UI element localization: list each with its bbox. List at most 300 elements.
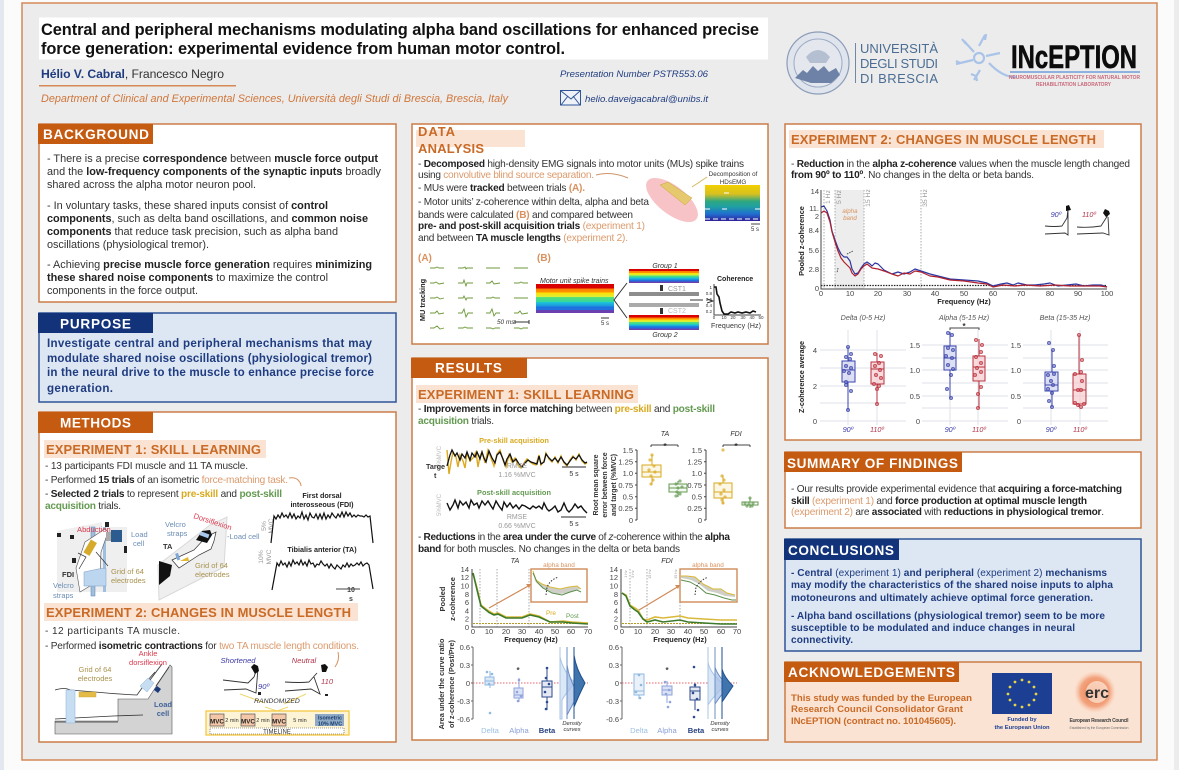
panel: summary of findings (784, 452, 1141, 528)
chart: post-skill force trace: 5 s (569, 521, 579, 528)
chart: pre-skill force trace: Pre-skill acquisition (479, 436, 549, 445)
timeline: 2 min (256, 718, 270, 724)
chart: TA pooled z-coherence: 50 (551, 627, 559, 636)
chart: FDI pooled z-coherence: 10 (610, 582, 618, 590)
chart: TA area under the curve ratio: of z-coherence (Post/Pre) (447, 639, 456, 728)
chart: alpha box plot: 110º (972, 425, 986, 434)
chart: pooled z-coherence by muscle length: 20 (874, 289, 882, 298)
chart: pooled z-coherence by muscle length: 2.8 (809, 265, 819, 274)
chart: TA pooled z-coherence: 10 (485, 627, 493, 636)
figure: leg dynamometer setup: dorsiflexion (129, 658, 167, 667)
chart: RMSE box plots FDI: 1.0 (692, 469, 702, 478)
chart: FDI pooled z-coherence: 0 (620, 627, 624, 636)
chart: TA pooled z-coherence: 20 (502, 627, 510, 636)
chart: FDI area under the curve ratio: -0.6 (606, 715, 619, 724)
force matching text: acquisition trials. (418, 416, 494, 427)
chart: FDI pooled z-coherence: 8 (614, 590, 618, 599)
chart: TA pooled z-coherence: 0 (465, 623, 469, 632)
panel: experiment 2 results (785, 124, 1141, 440)
chart: TA pooled z-coherence: 60 (567, 627, 575, 636)
chart: TA area under the curve ratio: Area under the curve ratio (437, 638, 446, 729)
chart: pooled z-coherence by muscle length: 1 Hz (825, 189, 832, 204)
logo: European Research Council (1070, 671, 1129, 730)
acknowledgement text: This study was funded by the European (791, 693, 972, 704)
chart: beta box plot: Beta (15-35 Hz) (1040, 313, 1090, 322)
figure: foot positions and timeline (206, 652, 349, 736)
chart: FDI area under the curve ratio: 0.6 (609, 643, 619, 652)
timeline: MVC (241, 718, 255, 726)
background text: - There is a precise correspondence between muscle force output (47, 153, 378, 165)
timeline: 10% MVC (318, 722, 342, 728)
chart: alpha box plot: 1.5 (910, 341, 920, 350)
chart: FDI pooled z-coherence: 10 (634, 627, 642, 636)
chart: RMSE box plots TA: 0.5 (623, 492, 633, 502)
experiment 1 text: - Performed 15 trials of an isometric force-matching task. (45, 475, 288, 486)
figure: foot positions and timeline: Shortened (220, 656, 256, 665)
chart: RMSE box plots FDI (687, 431, 758, 525)
figure: leg setup for TA: straps (167, 529, 188, 538)
force matching text: - Improvements in force matching between pre-skill and post-skill (418, 404, 715, 415)
experiment 2 text: - Performed isometric contractions for two TA muscle length conditions. (45, 641, 359, 652)
chart: FDI pooled z-coherence: Frequency (Hz) (653, 635, 707, 644)
chart: pre-skill force trace: 1.16 %MVC (498, 472, 536, 479)
chart: pre-skill force trace: Targe (426, 462, 445, 471)
chart: pooled z-coherence by muscle length: 0 (819, 289, 823, 298)
logo: INcEPTION: REHABILITATION LABORATORY (1036, 82, 1111, 88)
background text: - Achieving precise muscle force generation requires minimizing (47, 259, 372, 271)
chart: TA area under the curve ratio: 0.6 (460, 643, 470, 652)
figure: leg dynamometer setup: Grid of 64 (79, 665, 111, 674)
figure: leg setup for TA: electrodes (195, 570, 230, 579)
background text: and the low-frequency components of the synaptic inputs broadly (47, 166, 382, 178)
chart: pooled z-coherence by muscle length: 30 (903, 289, 911, 298)
chart: FDI area under the curve ratio: 0.3 (609, 661, 619, 670)
chart: RMSE box plots FDI: 0.5 (692, 492, 702, 502)
panel: data analysis (412, 124, 768, 344)
chart: pre-skill force trace (426, 436, 587, 480)
chart: TA area under the curve ratio: curves (563, 727, 581, 733)
heading: data analysis: ANALYSIS (418, 141, 484, 156)
chart: RMSE box plots TA: Root mean square (593, 454, 600, 516)
icon: foot at 90 and 110 degrees: 110º (1082, 210, 1096, 219)
figure: hand setup for FDI: Abduction (77, 525, 111, 534)
chart: FDI area under the curve ratio: Delta (630, 726, 649, 735)
coherence chart: 50 (758, 315, 764, 320)
heading: purpose (38, 313, 153, 333)
presentation number: Presentation Number PSTR553.06 (560, 69, 709, 80)
chart: RMSE box plots FDI: 0.25 (687, 504, 702, 513)
timeline: MVC (210, 718, 224, 726)
chart: FDI pooled z-coherence: 0 (614, 623, 618, 632)
chart: delta box plot: 2 (813, 382, 817, 391)
purpose text: modulate shared noise oscillations (physiological tremor) (47, 352, 372, 365)
title: force generation: experimental evidence from human motor control. (41, 40, 565, 58)
chart: alpha box plot: 0 (916, 417, 920, 426)
purpose text: generation. (47, 382, 113, 395)
icon: foot at 90 and 110 degrees (1045, 205, 1110, 235)
density curves TA (560, 647, 585, 719)
panel: purpose (38, 313, 396, 402)
figure: hand setup for FDI (53, 522, 148, 600)
chart: RMSE box plots TA: TA (661, 431, 670, 438)
conclusions text: - Central (experiment 1) and peripheral (experiment 2) mechanisms (791, 568, 1107, 579)
conclusions text: susceptible to be modulated and induce changes in neural (791, 623, 1075, 634)
background text: components that reduce task precision, such as alpha band (47, 226, 338, 238)
chart: beta box plot: 1.5 (1011, 341, 1021, 350)
subheading: experiment 1: EXPERIMENT 1: SKILL LEARNING (46, 442, 261, 457)
figure: muscle and HDsEMG decomposition: Decomposition of (709, 171, 758, 178)
data analysis text: pre- and post-skill acquisition trials (experiment 1) (418, 221, 645, 232)
force matching text (418, 404, 715, 427)
chart: RMSE box plots FDI: FDI (730, 431, 742, 438)
chart: pooled z-coherence by muscle length: Frequency (Hz) (937, 297, 991, 306)
chart: FDI pooled z-coherence: 14 (610, 565, 618, 574)
acknowledgement text (791, 693, 972, 727)
logo: Università degli Studi di Brescia (787, 32, 938, 94)
chart: TA area under the curve ratio: Density (562, 721, 583, 727)
chart: FDI area under the curve ratio: -0.3 (606, 697, 619, 706)
chart: RMSE box plots TA: 0.75 (618, 481, 633, 490)
chart: FDI area under the curve ratio: curves (711, 727, 729, 733)
chart: FDI pooled z-coherence: 12 (610, 573, 618, 582)
chart: RMSE box plots TA: 1.25 (618, 458, 633, 466)
chart: pooled z-coherence by muscle length: 11. (809, 204, 819, 213)
figure: (B) coherence pipeline: CST1 (668, 286, 686, 293)
figure: hand setup for FDI: Velcro (53, 581, 74, 590)
figure: hand setup for FDI: Grid of 64 (111, 567, 144, 576)
coherence chart (706, 276, 764, 330)
chart: beta box plot: 110º (1073, 425, 1087, 434)
acknowledgement text: INcEPTION (contract no. 101045605). (791, 716, 956, 727)
chart: delta box plot: 4 (813, 346, 817, 355)
experiment 1 text (45, 461, 301, 512)
figure: leg setup for TA: -Load cell (227, 532, 260, 541)
chart: pooled z-coherence by muscle length: 15 Hz (865, 189, 872, 207)
panel: results (411, 358, 768, 740)
chart: pooled z-coherence by muscle length: 5.6 (809, 246, 819, 255)
data analysis text (418, 159, 744, 244)
background text: components, such as delta band oscillations, and common noise (47, 213, 368, 225)
chart: TA pooled z-coherence: 30 (518, 627, 526, 636)
heading: conclusions (784, 539, 899, 560)
background text: these shared noise components to maximize the control (47, 272, 328, 284)
chart: FDI area under the curve ratio: Beta (688, 726, 705, 735)
chart: pooled z-coherence by muscle length: 5 Hz (836, 189, 843, 204)
chart: pooled z-coherence by muscle length: 8.4 (809, 226, 819, 235)
data analysis text: bands were calculated (B) and compared between (418, 210, 633, 221)
chart: TA area under the curve ratio: -0.6 (457, 715, 470, 724)
chart: TA pooled z-coherence: Pre (546, 610, 556, 617)
chart: post-skill force trace (437, 488, 587, 530)
inset: TA alpha band (531, 562, 587, 602)
chart: TA area under the curve ratio: 0 (466, 679, 470, 688)
experiment 1 text: - Selected 2 trials to represent pre-skill and post-skill (45, 489, 282, 500)
experiment 2 results text: from 90º to 110º. No changes in the delta or beta bands. (791, 170, 1034, 181)
density curves FDI (708, 647, 733, 719)
coherence chart: 0.8 (706, 291, 712, 296)
logo: INcEPTION: INcEPTION (1011, 39, 1137, 75)
data analysis text: and between TA muscle lengths (experiment 2). (418, 233, 628, 244)
logo: European Research Council: Established by the European Commission (1070, 726, 1128, 730)
chart: TA area under the curve ratio (437, 638, 588, 735)
chart: RMSE box plots FDI: 0 (698, 516, 702, 525)
chart: RMSE box plots FDI: 1.25 (687, 458, 702, 466)
chart: pre-skill force trace: 5%MVC (437, 445, 443, 468)
heading: experiment 2 results: EXPERIMENT 2: CHANGES IN MUSCLE LENGTH (791, 132, 1096, 147)
chart: pre-skill force trace: t (434, 471, 437, 480)
subheading: experiment 1 results: EXPERIMENT 1: SKILL LEARNING (418, 387, 634, 402)
conclusions text: - Alpha band oscillations (physiological tremor) seem to be more (791, 611, 1105, 622)
chart: FDI pooled z-coherence: 20 (651, 627, 659, 636)
figure: leg setup for TA: Grid of 64 (195, 561, 228, 570)
chart: pooled z-coherence by muscle length: 10 (846, 289, 854, 298)
figure: (B) coherence pipeline (536, 253, 764, 339)
figure: hand setup for FDI: straps (53, 591, 74, 600)
chart: FDI area under the curve ratio: 0 (615, 679, 619, 688)
chart: alpha box plot: 1.0 (910, 366, 920, 375)
area under the curve text (418, 532, 730, 555)
logo: INcEPTION: NEUROMUSCULAR PLASTICITY FOR NATURAL MOTOR (1009, 75, 1140, 81)
chart: alpha box plot: 90º (945, 425, 956, 434)
conclusions text: motoneurons and ultimately achieve optimal force generation. (791, 593, 1093, 604)
timeline: 2 min (225, 718, 239, 724)
coherence chart: 30 (740, 315, 746, 320)
figure: foot positions and timeline: 110 (321, 677, 334, 686)
chart: post-skill force trace: RMSE (507, 514, 527, 521)
chart: FDI area under the curve ratio: * (665, 666, 669, 675)
chart: pooled z-coherence by muscle length: 0 (815, 284, 819, 293)
chart: TA force trace: Tibialis anterior (TA) (287, 545, 357, 554)
summary text: skill (experiment 1) and force production at optimal muscle length (791, 496, 1087, 507)
chart: TA area under the curve ratio: Delta (481, 726, 500, 735)
logo: Università degli Studi di Brescia: DI BRESCIA (860, 71, 938, 86)
chart: delta box plot: 90º (843, 425, 854, 434)
chart: beta box plot: 1.0 (1011, 366, 1021, 375)
coherence chart: 1 (709, 285, 712, 290)
purpose text: in the neural drive to the muscle to enhance precise force (47, 366, 375, 379)
chart: beta box plot: 0 (1017, 417, 1021, 426)
experiment 1 text: - 13 participants FDI muscle and 11 TA muscle. (45, 461, 248, 472)
chart: RMSE box plots FDI: * (734, 442, 738, 451)
chart: TA area under the curve ratio: 0.3 (460, 661, 470, 670)
figure: (B) coherence pipeline: Group 1 (652, 263, 678, 270)
chart: pooled z-coherence by muscle length: band (843, 215, 857, 222)
background text (47, 153, 382, 297)
experiment 2 text (45, 626, 359, 652)
timeline: MVC (272, 718, 286, 726)
acknowledgement text: Research Council Consolidator Grant (791, 704, 964, 715)
chart: pooled z-coherence by muscle length: 40 (931, 289, 939, 298)
title (39, 18, 768, 60)
chart: FDI force trace: MVC (268, 518, 275, 534)
chart: RMSE box plots FDI: 0.75 (687, 481, 702, 490)
chart: delta box plot (797, 313, 906, 434)
figure: muscle and HDsEMG decomposition: HDsEMG (720, 179, 746, 186)
experiment 2 results text: - Reduction in the alpha z-coherence values when the muscle length changed (791, 159, 1130, 170)
panel: methods (38, 412, 396, 742)
heading: background: BACKGROUND (43, 127, 149, 142)
chart: TA pooled z-coherence: 2 (465, 614, 469, 624)
chart: pooled z-coherence by muscle length: 2 (815, 212, 819, 221)
figure: leg dynamometer setup: electrodes (78, 674, 113, 683)
heading: data analysis (416, 124, 525, 156)
chart: pooled z-coherence by muscle length: 70 (1017, 289, 1025, 298)
subheading: experiment 2: EXPERIMENT 2: CHANGES IN MUSCLE LENGTH (46, 605, 351, 620)
coherence chart: Frequency (Hz) (711, 323, 761, 330)
inset: TA alpha band: alpha band (543, 562, 575, 569)
chart: post-skill force trace: Post-skill acquisition (477, 488, 551, 497)
affiliation: Department of Clinical and Experimental Sciences, Università degli Studi di Brescia, Brescia, Italy (41, 93, 509, 105)
logo: European Research Council: European Research Council (1070, 718, 1129, 724)
coherence chart: 20 (730, 315, 736, 320)
chart: delta box plot: 110º (870, 425, 884, 434)
heading: results: RESULTS (435, 360, 502, 376)
area under the curve text: band for both muscles. No changes in the delta or beta bands (418, 544, 680, 555)
chart: RMSE box plots TA (593, 431, 687, 525)
figure: leg dynamometer setup: Ankle (139, 649, 157, 658)
coherence chart: 0.4 (706, 303, 712, 308)
coherence chart: 0.2 (706, 309, 712, 314)
chart: TA force trace: MVC (266, 549, 273, 565)
chart: FDI pooled z-coherence: 4 (614, 606, 618, 616)
figure: foot positions and timeline: Neutral (292, 656, 317, 665)
coherence chart: 40 (749, 315, 755, 320)
chart: FDI pooled z-coherence: 50 (700, 627, 708, 636)
figure: (A) motor unit tracking: 50 ms (497, 319, 515, 326)
chart: FDI pooled z-coherence: 15 Hz (648, 569, 652, 579)
chart: TA pooled z-coherence: Post (566, 613, 579, 620)
chart: FDI pooled z-coherence: FDI (661, 556, 673, 565)
heading: summary of findings: SUMMARY OF FINDINGS (787, 456, 958, 471)
timeline: Isometric (318, 716, 342, 722)
background text: shared across the alpha motor neuron pool. (47, 179, 256, 191)
chart: FDI force trace: interosseous (FDI) (290, 500, 354, 509)
background text: - In voluntary tasks, these shared inputs consist of control (47, 200, 328, 212)
chart: TA pooled z-coherence: 12 (461, 573, 469, 582)
chart: TA pooled z-coherence: 70 (584, 627, 592, 636)
figure: (B) coherence pipeline: (B) (537, 253, 551, 264)
chart: pooled z-coherence by muscle length: 80 (1046, 289, 1054, 298)
chart: TA pooled z-coherence: 40 (535, 627, 543, 636)
logo: Università degli Studi di Brescia: DEGLI STUDI (860, 56, 938, 71)
background text: oscillations (physiological tremor). (47, 239, 209, 251)
chart: TA pooled z-coherence (438, 556, 592, 644)
coherence chart: 0 (713, 315, 716, 320)
chart: TA pooled z-coherence: Pooled (438, 586, 447, 612)
chart: FDI force trace (261, 491, 373, 543)
figure: leg setup for TA: Dorsiflexion (192, 511, 233, 532)
chart: TA force trace: 10 (347, 587, 355, 594)
purpose text: Investigate central and peripheral mechanisms that may (47, 337, 373, 350)
heading: results (411, 358, 527, 378)
chart: TA pooled z-coherence: TA (511, 556, 520, 565)
figure: hand setup for FDI: cell (133, 539, 145, 548)
chart: pooled z-coherence by muscle length: 100 (1101, 289, 1113, 298)
chart: pooled z-coherence by muscle length: Pooled z-coherence (797, 206, 806, 276)
coherence chart: 0.6 (706, 297, 712, 302)
figure: hand setup for FDI: electrodes (111, 576, 146, 585)
data analysis text: - Motor units’ z-coherence within delta, alpha and beta (418, 197, 649, 208)
figure: leg dynamometer setup (55, 649, 172, 734)
logo: funded by the European Union: Funded by (1007, 717, 1037, 723)
chart: delta box plot: Z-coherence average (797, 341, 806, 413)
chart: TA pooled z-coherence: 14 (461, 565, 469, 574)
chart: post-skill force trace: 5%MVC (437, 493, 443, 516)
chart: pre-skill force trace: 5 s (569, 471, 579, 478)
chart: beta box plot: 90º (1046, 425, 1057, 434)
figure: muscle and HDsEMG decomposition: 5 s (751, 227, 759, 233)
logo: Università degli Studi di Brescia: UNIVERSITÀ (860, 41, 938, 56)
chart: alpha box plot (910, 313, 1008, 434)
chart: RMSE box plots TA: 0.25 (618, 504, 633, 513)
chart: beta box plot: 0.5 (1011, 392, 1021, 401)
chart: TA pooled z-coherence: Frequency (Hz) (504, 635, 558, 644)
chart: FDI pooled z-coherence (610, 556, 741, 644)
chart: TA pooled z-coherence: 0 (471, 627, 475, 636)
chart: TA force trace: s (349, 596, 353, 603)
logo: European Research Council: erc (1085, 685, 1109, 702)
chart: TA pooled z-coherence: 4 (465, 606, 469, 616)
conclusions text (791, 568, 1113, 646)
chart: TA area under the curve ratio: * (516, 666, 520, 675)
chart: alpha box plot: * (962, 322, 966, 331)
chart: RMSE box plots TA: and target (%MVC) (611, 454, 618, 516)
chart: TA pooled z-coherence: 10 (461, 582, 469, 590)
conclusions text: connectivity. (791, 635, 853, 646)
chart: FDI area under the curve ratio: Density (710, 721, 731, 727)
figure: (A) motor unit tracking: (A) (418, 253, 432, 264)
chart: post-skill force trace: 0.66 %MVC (498, 523, 536, 530)
chart: RMSE box plots TA: * (663, 442, 667, 451)
chart: FDI pooled z-coherence: 5 Hz (631, 570, 635, 578)
chart: FDI pooled z-coherence: 2 (614, 614, 618, 624)
figure: (A) motor unit tracking (418, 253, 529, 329)
figure: (B) coherence pipeline: Motor unit spike trains (540, 278, 609, 285)
chart: pooled z-coherence by muscle length: 50 (960, 289, 968, 298)
chart: delta box plot: 0 (813, 417, 817, 426)
chart: FDI pooled z-coherence: 30 (667, 627, 675, 636)
chart: FDI area under the curve ratio: Alpha (657, 726, 677, 735)
heading: methods: METHODS (60, 416, 131, 430)
timeline (206, 711, 349, 736)
figure: (A) motor unit tracking: MU tracking (418, 278, 427, 321)
figure: muscle and HDsEMG decomposition (639, 170, 760, 233)
chart: FDI force trace: First dorsal (302, 491, 342, 500)
chart: RMSE box plots TA: 1.5 (623, 446, 633, 455)
figure: leg dynamometer setup: Load (154, 700, 172, 709)
chart: TA pooled z-coherence: 6 (465, 598, 469, 607)
background text: components in the force output. (47, 285, 198, 297)
chart: delta box plot: Delta (0-5 Hz) (841, 313, 885, 322)
logo: funded by the European Union: the European Union (994, 725, 1050, 731)
panel: acknowledgements (784, 662, 1141, 742)
chart: TA area under the curve ratio: Alpha (509, 726, 529, 735)
chart: FDI pooled z-coherence: 40 (684, 627, 692, 636)
authors: Hélio V. Cabral, Francesco Negro (41, 67, 224, 81)
figure: leg dynamometer setup: cell (157, 709, 169, 718)
figure: hand setup for FDI: FDI (62, 570, 74, 579)
timeline: 5 min (293, 718, 307, 724)
logo: funded by the European Union (992, 673, 1052, 731)
experiment 2 text: - 12 participants TA muscle. (45, 626, 180, 637)
chart: RMSE box plots TA: 1.0 (623, 469, 633, 478)
data analysis text: using convolutive blind source separation. (418, 170, 594, 181)
chart: alpha box plot: 0.5 (910, 392, 920, 401)
chart: RMSE box plots TA: error between force (602, 452, 609, 518)
figure: leg setup for TA (158, 511, 260, 600)
data analysis text: - MUs were tracked between trials (A). (418, 183, 585, 194)
chart: pooled z-coherence by muscle length: alpha (842, 208, 858, 215)
